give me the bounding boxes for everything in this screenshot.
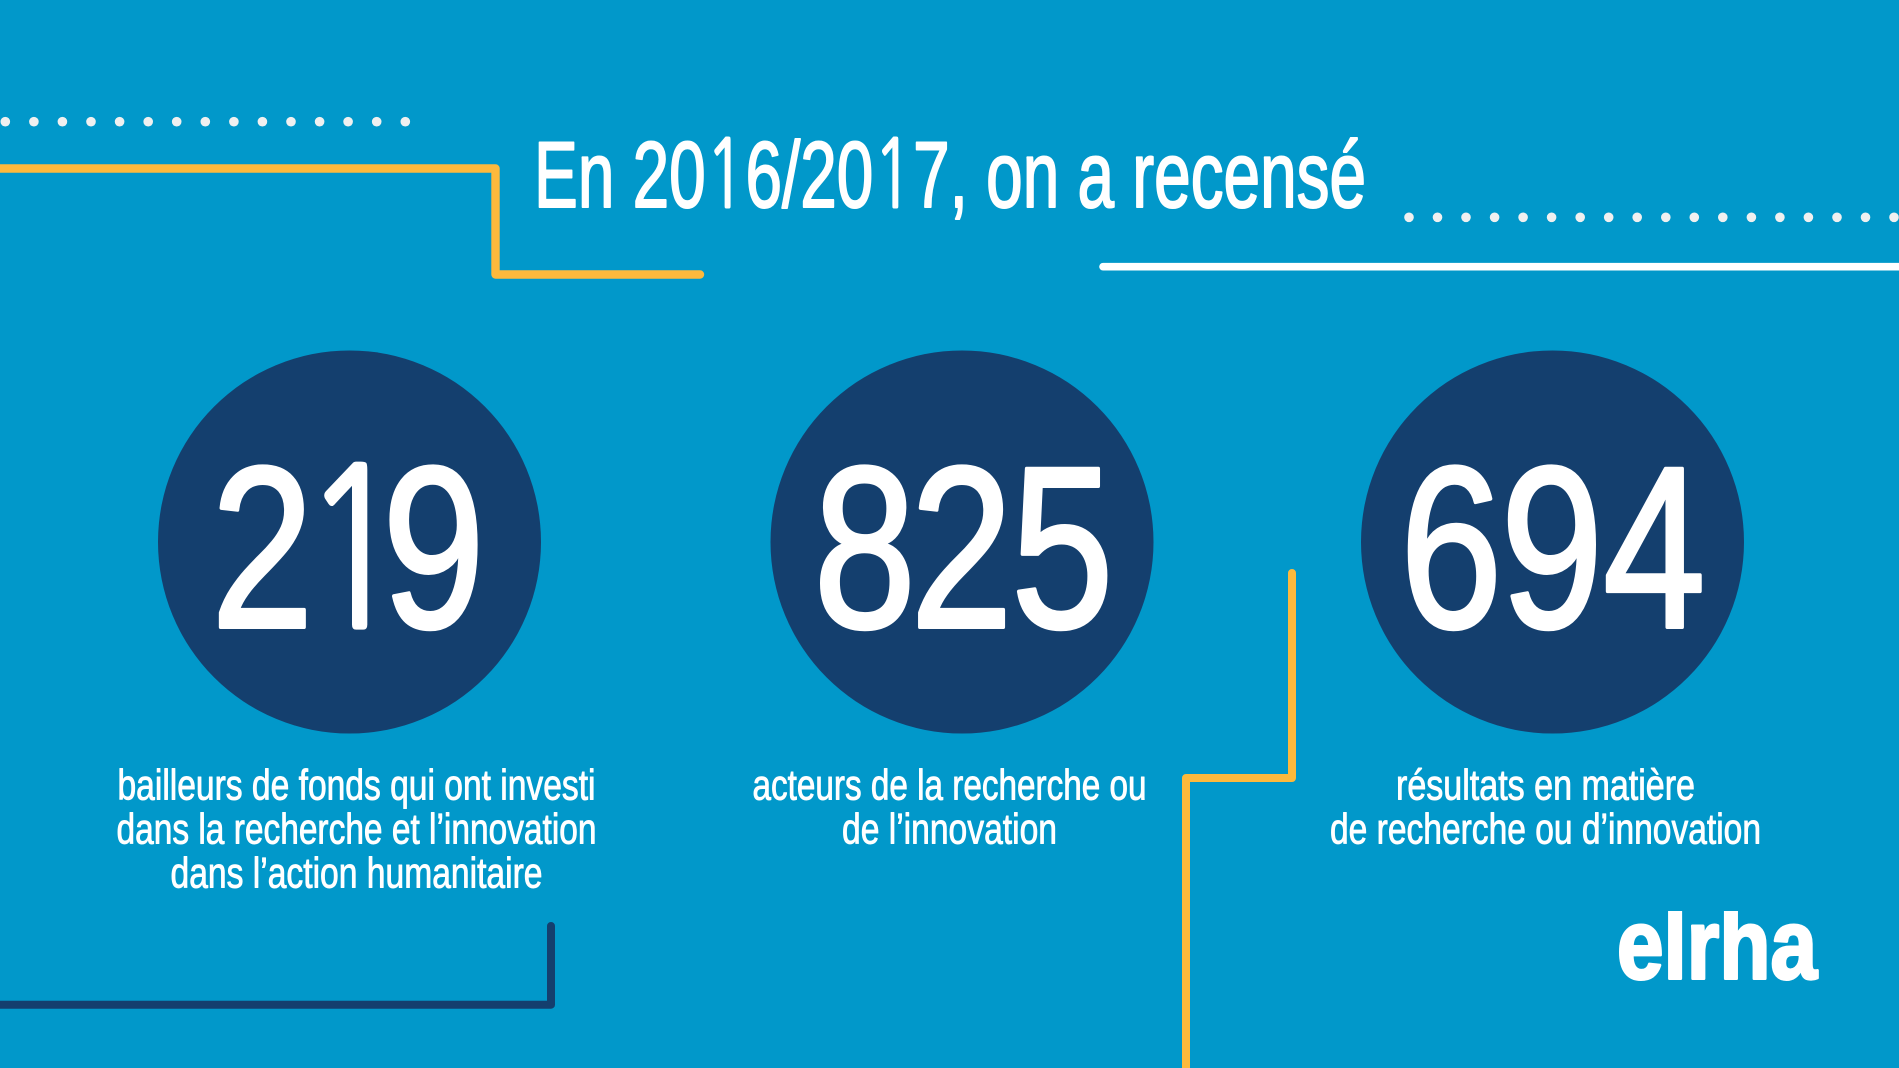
top-right white line: [1103, 263, 1899, 271]
stat circle: 825: 825: [814, 419, 1114, 677]
caption: résultats: de recherche ou d’innovation: [1330, 806, 1761, 854]
caption: résultats: [1330, 762, 1761, 854]
stat circle: 694: 694: [1400, 419, 1706, 677]
caption: bailleurs de fonds: dans la recherche et l’innovation: [116, 806, 596, 854]
title: En 2016/2017, on a recensé: [534, 122, 1366, 227]
top-left yellow stepped line: [0, 168, 700, 274]
top-right dotted line: [1404, 212, 1899, 222]
stat circle: 219: 219: [211, 419, 485, 677]
caption: acteurs de la recherche: acteurs de la recherche ou: [752, 762, 1146, 810]
stat circle: 694: [1361, 350, 1744, 734]
caption: bailleurs de fonds: bailleurs de fonds qui ont investi: [118, 762, 596, 810]
logo: elrha: elrha: [1617, 888, 1818, 1000]
caption: bailleurs de fonds: [116, 762, 596, 898]
stat circle: 825: [770, 350, 1154, 734]
caption: acteurs de la recherche: [752, 762, 1146, 854]
top-left dotted line: [0, 117, 410, 126]
caption: résultats: résultats en matière: [1396, 762, 1695, 810]
right yellow stepped line: [1186, 573, 1292, 1068]
stat circle: 219: [158, 350, 541, 734]
caption: bailleurs de fonds: dans l’action humanitaire: [170, 850, 542, 898]
caption: acteurs de la recherche: de l’innovation: [842, 806, 1057, 854]
navy corner line: [0, 926, 551, 1005]
